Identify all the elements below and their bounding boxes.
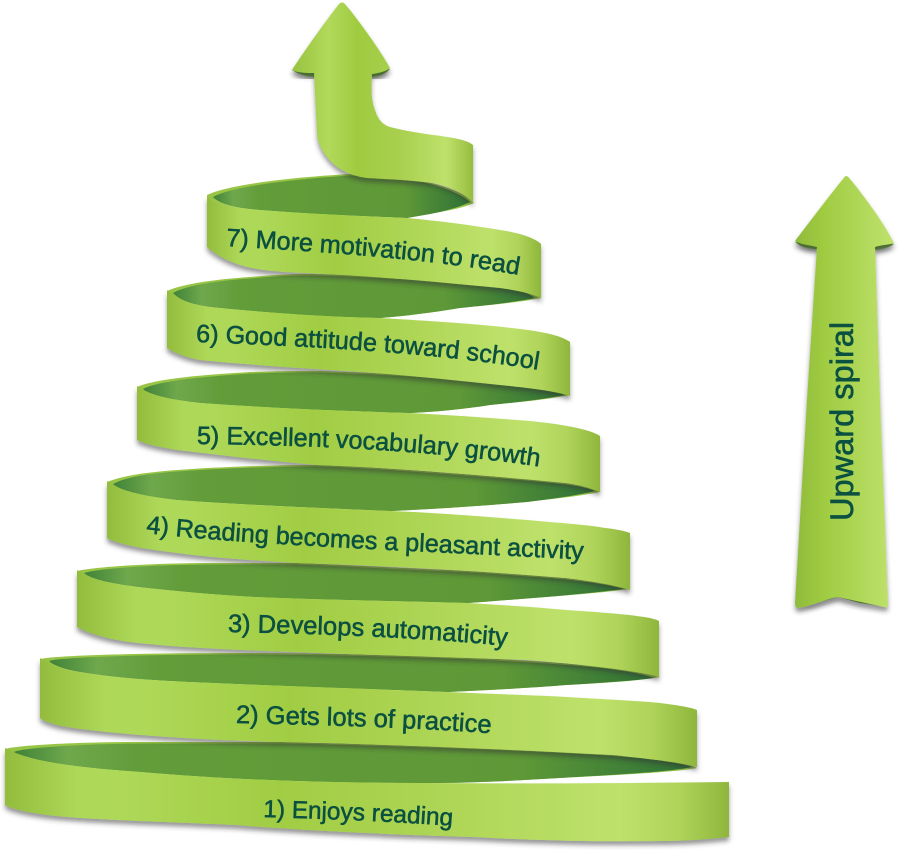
ring 7: more motivation to read	[204, 174, 544, 304]
ring 3: develops automaticity	[74, 563, 662, 684]
label 6: 6) Good attitude toward school	[197, 324, 540, 370]
ring 4: reading becomes a pleasant activity	[104, 465, 634, 596]
label 2: 2) Gets lots of practice	[236, 704, 491, 734]
label 5: 5) Excellent vocabulary growth	[198, 426, 540, 467]
arrow body	[795, 176, 894, 608]
label 3: 3) Develops automaticity	[228, 614, 508, 650]
upward spiral arrow	[795, 176, 894, 608]
arrow label: Upward spiral	[823, 322, 860, 521]
label 1: 1) Enjoys reading	[264, 799, 452, 831]
ring 5: excellent vocabulary growth	[134, 371, 604, 498]
ring 2: gets lots of practice	[36, 653, 700, 774]
spiral top arrow	[292, 2, 473, 203]
label 7: 7) More motivation to read	[228, 228, 520, 275]
ring 6: good attitude toward school	[164, 274, 574, 402]
arrow notch and barb undersides	[795, 240, 894, 607]
ring 1: enjoys reading	[2, 742, 732, 848]
label 4: 4) Reading becomes a pleasant activity	[146, 516, 584, 564]
